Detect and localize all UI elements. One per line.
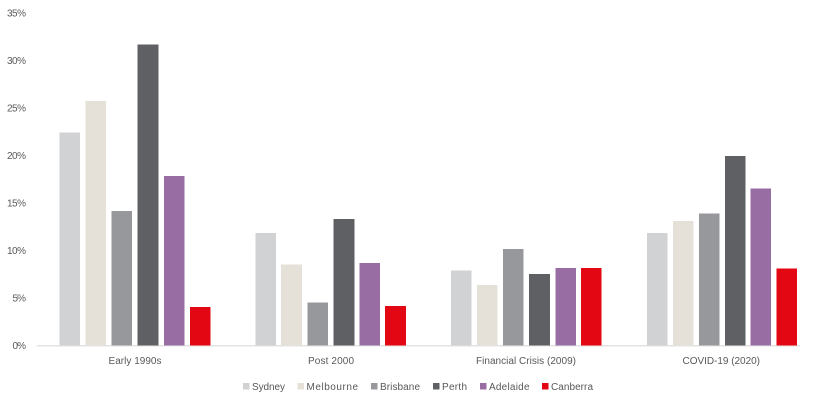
legend: Melbourne [306, 382, 358, 393]
x axis category labels [108, 356, 760, 367]
bars: Post 2000 [256, 219, 406, 346]
legend: Perth [442, 382, 467, 393]
bars: Financial Crisis (2009) [451, 249, 602, 346]
y axis labels: 30% [7, 56, 26, 67]
x axis category labels: Early 1990s [108, 356, 162, 367]
bars: COVID-19 (2020) [647, 156, 797, 346]
y axis labels: 20% [7, 151, 26, 162]
legend: Canberra [551, 382, 593, 393]
x axis category labels: Financial Crisis (2009) [476, 356, 576, 367]
legend: Sydney [252, 382, 285, 393]
legend: Adelaide [489, 382, 530, 393]
y axis labels [7, 8, 26, 352]
y axis labels: 10% [7, 246, 26, 257]
y axis labels: 25% [7, 104, 26, 114]
x axis category labels: Post 2000 [308, 356, 354, 367]
y axis labels: 15% [7, 198, 26, 210]
x axis line [37, 345, 800, 346]
legend [243, 382, 593, 393]
y axis labels: 35% [7, 8, 26, 20]
y axis labels: 0% [12, 341, 26, 352]
bars: Early 1990s [60, 44, 210, 346]
y axis labels: 5% [12, 294, 26, 304]
legend: Brisbane [380, 382, 420, 393]
x axis category labels: COVID-19 (2020) [682, 356, 760, 367]
